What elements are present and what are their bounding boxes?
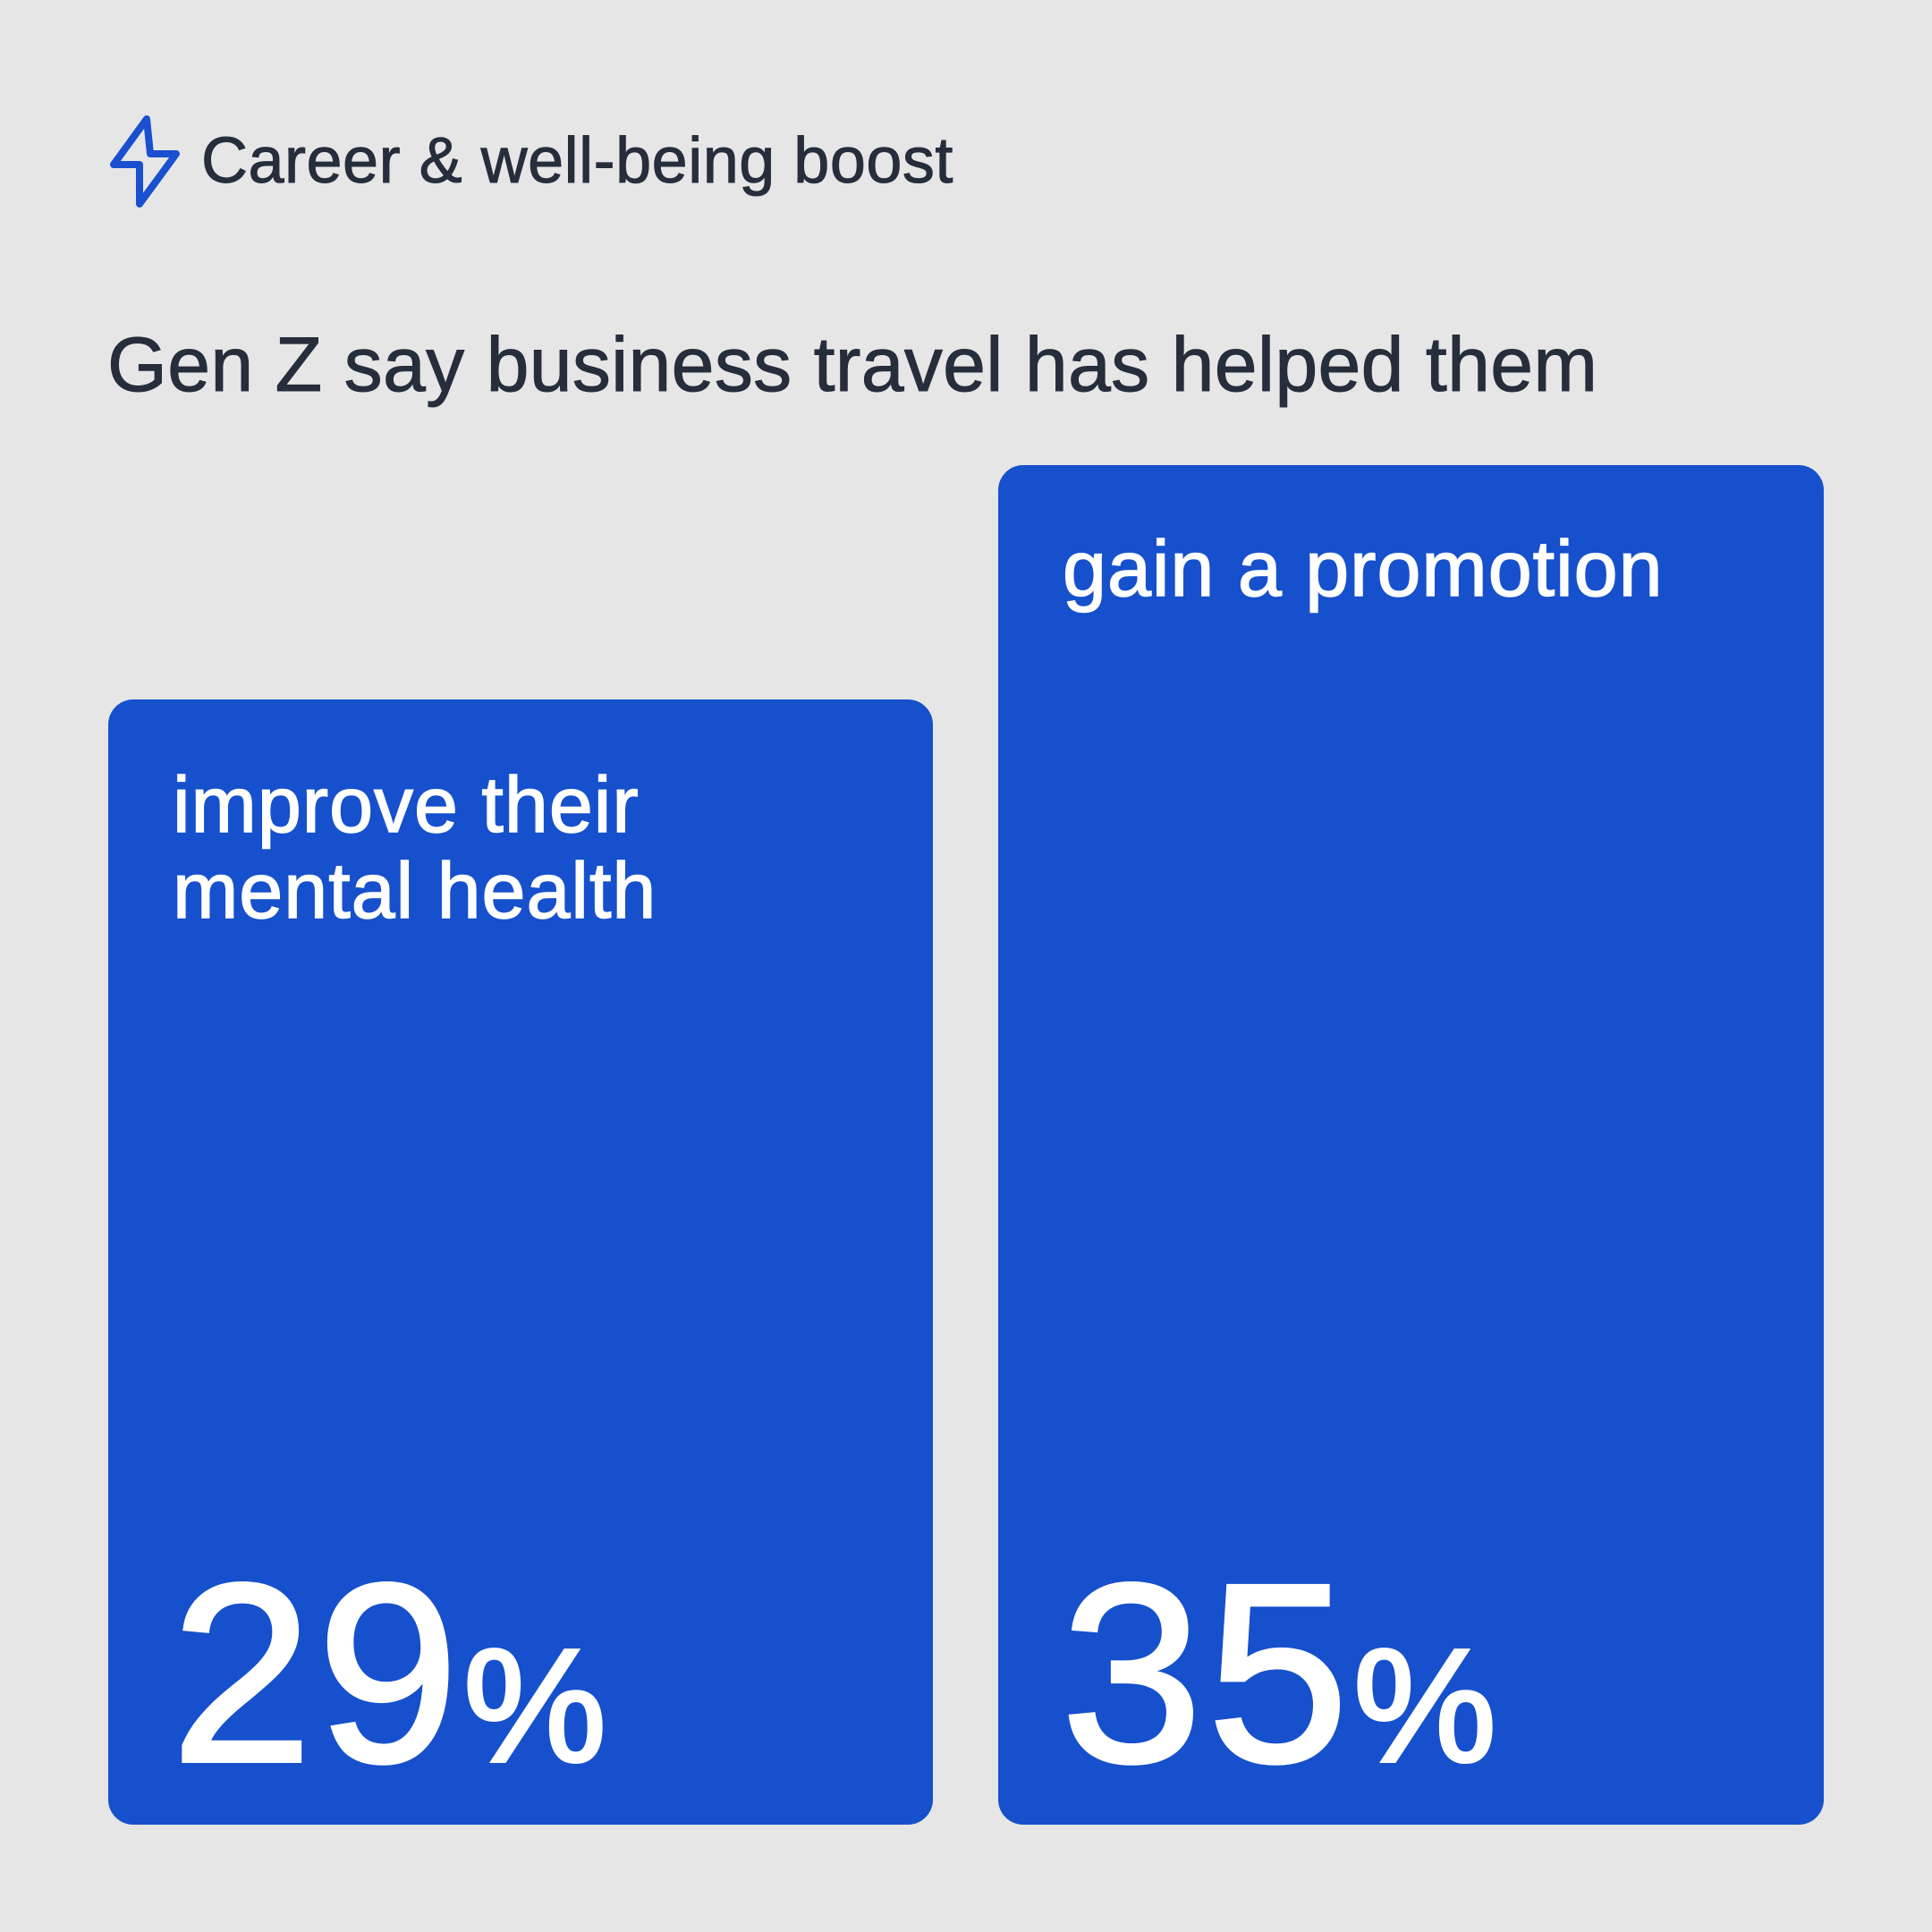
label: improve their mental health: improve their [173, 760, 640, 849]
value: 29%: 29% [171, 1531, 606, 1816]
label: gain a promotion: gain a promotion [1063, 524, 1664, 613]
subtitle: Gen Z say business travel has helped them [107, 322, 1597, 408]
label: improve their mental health [173, 760, 657, 935]
label: improve their mental health: mental health [173, 846, 657, 935]
value: 35%: 35% [1061, 1531, 1496, 1816]
icon: lightning bolt [110, 115, 180, 208]
panel: mental health bar [108, 699, 933, 1825]
heading: Career & well-being boost: Career & well-being boost [201, 125, 953, 197]
panel: promotion bar [998, 465, 1824, 1825]
